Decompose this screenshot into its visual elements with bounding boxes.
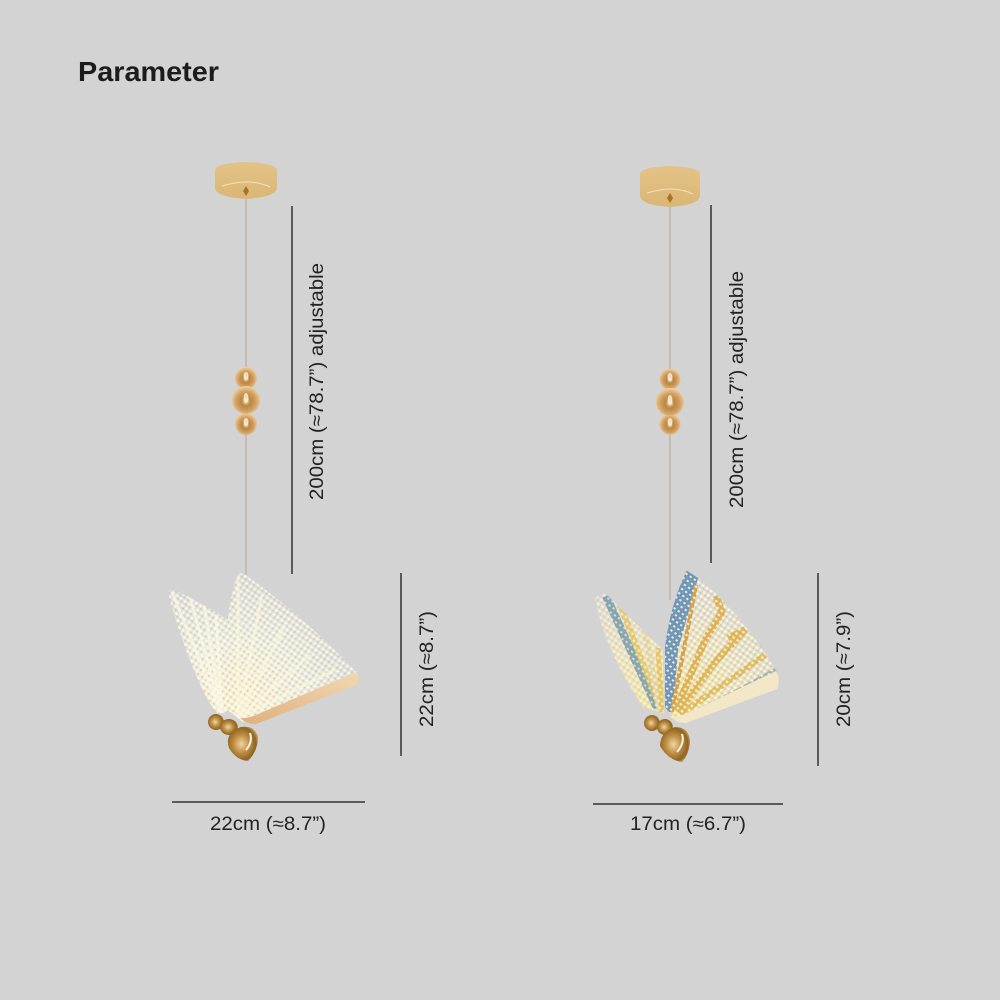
left pendant lamp bbox=[160, 162, 365, 761]
cord bbox=[669, 203, 671, 600]
body bbox=[644, 715, 690, 762]
front wing bbox=[665, 570, 777, 722]
wing bar bbox=[240, 672, 359, 724]
title: Parameter bbox=[78, 56, 219, 87]
left cord dimension: 200cm (≈78.7”) adjustable bbox=[307, 263, 328, 500]
right height dimension: 20cm (≈7.9”) bbox=[834, 611, 855, 727]
beads bbox=[232, 367, 260, 435]
ceiling canopy bbox=[640, 166, 700, 207]
back wing bbox=[168, 590, 228, 714]
right pendant lamp bbox=[590, 166, 782, 762]
right width dimension: 17cm (≈6.7”) bbox=[630, 814, 746, 835]
ceiling canopy bbox=[215, 162, 277, 199]
wing bar bbox=[670, 671, 779, 723]
cord bbox=[245, 195, 247, 575]
beads bbox=[656, 368, 684, 434]
back wing bbox=[595, 593, 664, 713]
left width dimension: 22cm (≈8.7”) bbox=[210, 814, 326, 835]
right cord dimension: 200cm (≈78.7”) adjustable bbox=[727, 271, 748, 508]
body bbox=[208, 714, 258, 761]
left height dimension: 22cm (≈8.7”) bbox=[417, 611, 438, 727]
front wing bbox=[227, 573, 357, 722]
